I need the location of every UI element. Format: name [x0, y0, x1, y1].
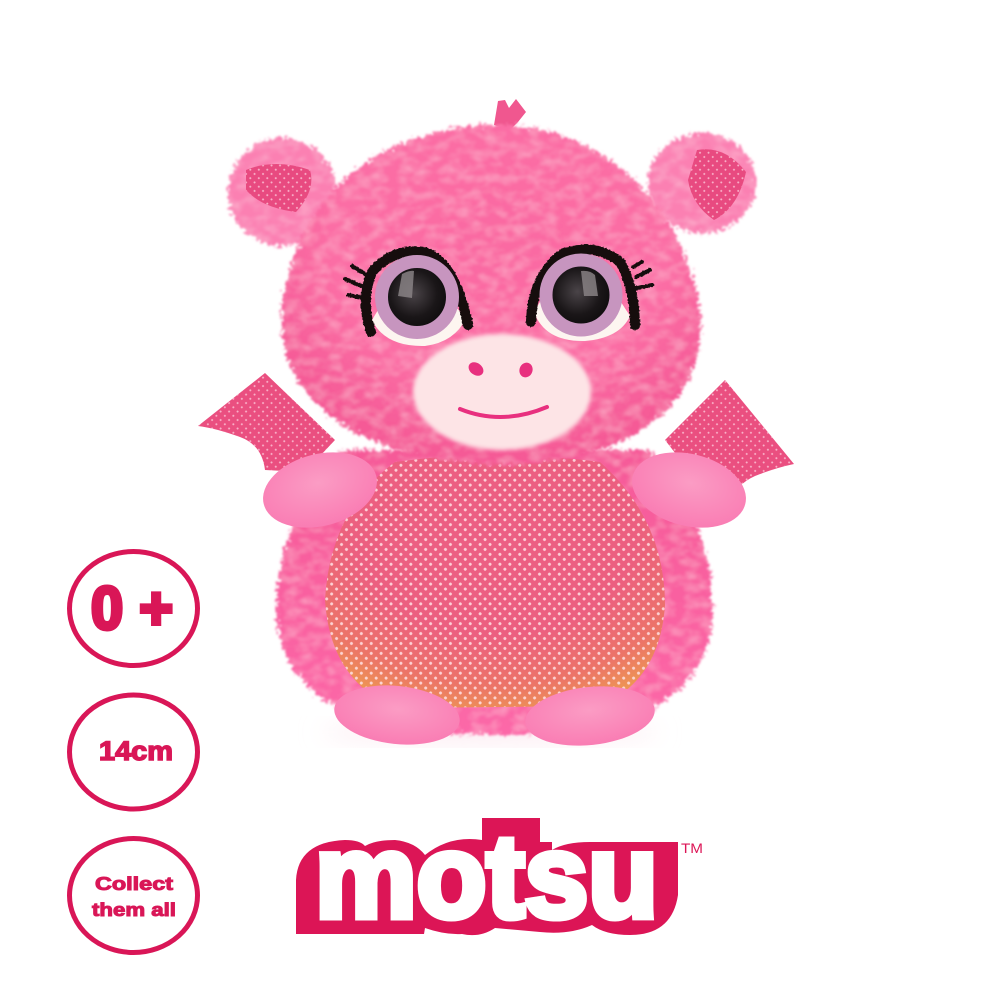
age label: 0 + [91, 575, 173, 642]
motsu logo [296, 811, 678, 943]
smile [460, 407, 547, 417]
right eye [531, 250, 652, 341]
badge: size 14cm [70, 695, 198, 809]
right wing [665, 380, 794, 505]
right ear [648, 133, 756, 233]
right foot [522, 680, 658, 752]
muzzle [413, 334, 591, 450]
collect label: Collect [95, 874, 173, 894]
logo backing [296, 818, 678, 935]
belly panel [325, 455, 665, 708]
left wing [198, 373, 335, 472]
logo wordmark: motsu [315, 811, 658, 943]
them all label: them all [92, 900, 176, 920]
trademark: TM [681, 840, 703, 856]
head [282, 125, 701, 465]
left arm [255, 441, 385, 539]
left nostril [466, 359, 486, 379]
body [277, 450, 712, 735]
plush dragon toy [198, 99, 794, 752]
size label: 14cm [99, 736, 173, 766]
head tuft [494, 99, 526, 130]
badge: collect them all [70, 838, 198, 952]
ground shadow [320, 724, 660, 740]
right arm [624, 441, 754, 539]
badge: age 0+ [70, 552, 198, 666]
left foot [331, 680, 463, 750]
right nostril [517, 361, 535, 379]
left ear [228, 138, 336, 246]
left eye [345, 251, 468, 346]
